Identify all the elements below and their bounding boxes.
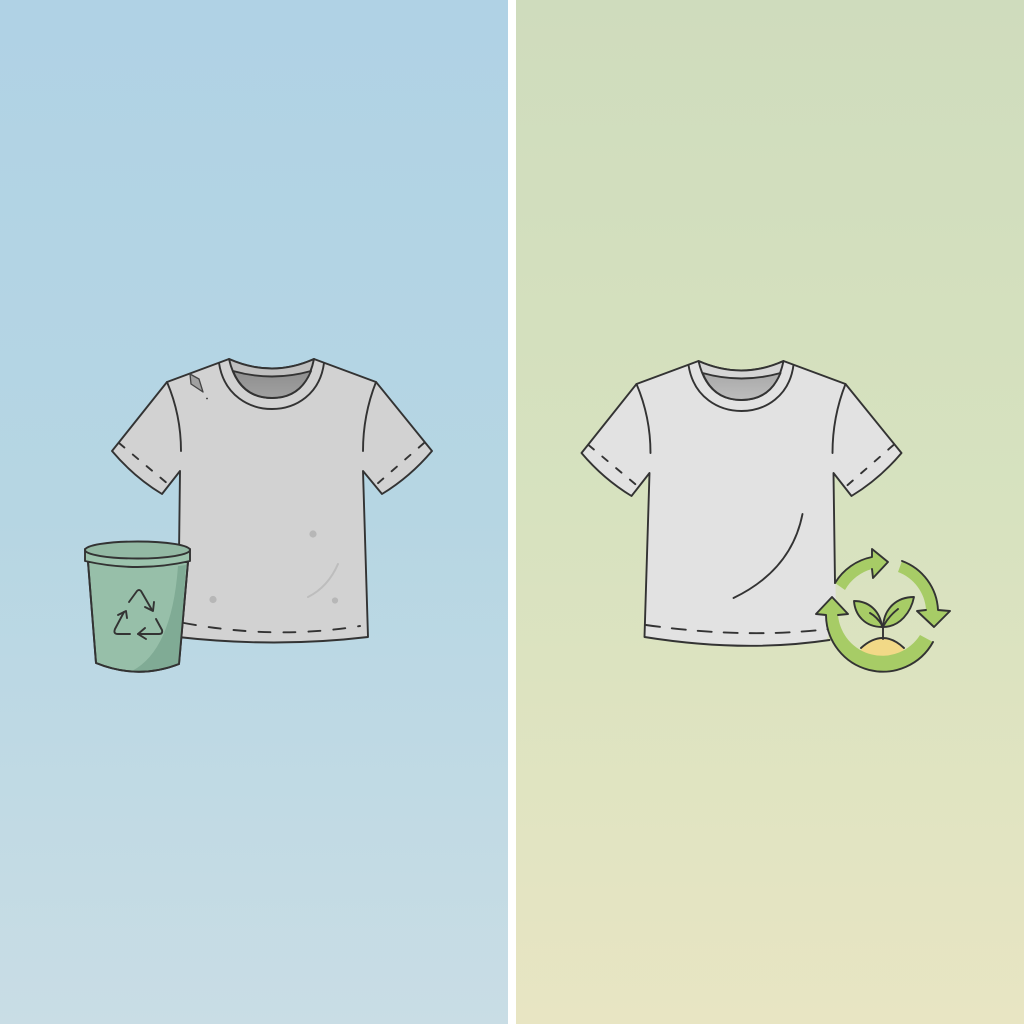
bin rim: [85, 549, 190, 567]
leaf veins: [870, 609, 898, 625]
crease: [308, 564, 338, 597]
clean t-shirt: [582, 361, 902, 646]
right cuff stitching: [377, 443, 424, 484]
collar rib: [219, 363, 324, 409]
bin body: [88, 562, 188, 672]
panel: right background: [516, 0, 1024, 1024]
stem: [882, 625, 884, 639]
left cuff stitching: [119, 443, 168, 484]
soil outline: [861, 638, 904, 648]
recycling loop with seedling: [816, 549, 950, 672]
shirt fill: [582, 361, 902, 646]
hem stitching: [646, 625, 830, 633]
soil mound: [861, 638, 904, 660]
right cuff stitching: [846, 445, 894, 486]
neck opening: [698, 361, 784, 400]
divider: [508, 0, 516, 1024]
recycle symbol: [114, 590, 162, 639]
panel: left background: [0, 0, 508, 1024]
bin outline: [88, 562, 188, 672]
bottom arrow: [816, 597, 933, 672]
neck opening: [229, 359, 314, 398]
left sleeve seam: [167, 382, 181, 451]
hem stitching: [184, 623, 360, 632]
right arrow: [898, 561, 950, 627]
shirt outline: [582, 361, 902, 646]
right leaf: [883, 597, 914, 627]
left sleeve seam: [636, 384, 650, 453]
bin lid: [85, 542, 190, 558]
inner neck: [233, 371, 311, 398]
stains: [209, 530, 338, 604]
top-left arrow: [835, 549, 888, 590]
shirt body: [112, 359, 432, 642]
shoulder tear: [190, 374, 203, 392]
inner neck: [702, 373, 780, 400]
left cuff stitching: [588, 445, 638, 486]
right sleeve seam: [363, 382, 376, 451]
recycling bin: [85, 542, 190, 672]
left leaf: [854, 601, 882, 627]
collar rib: [688, 365, 794, 411]
bin shade: [132, 565, 186, 671]
snag dot: [206, 398, 208, 399]
worn t-shirt: [112, 359, 432, 642]
crease: [734, 514, 802, 598]
right sleeve seam: [832, 384, 846, 453]
